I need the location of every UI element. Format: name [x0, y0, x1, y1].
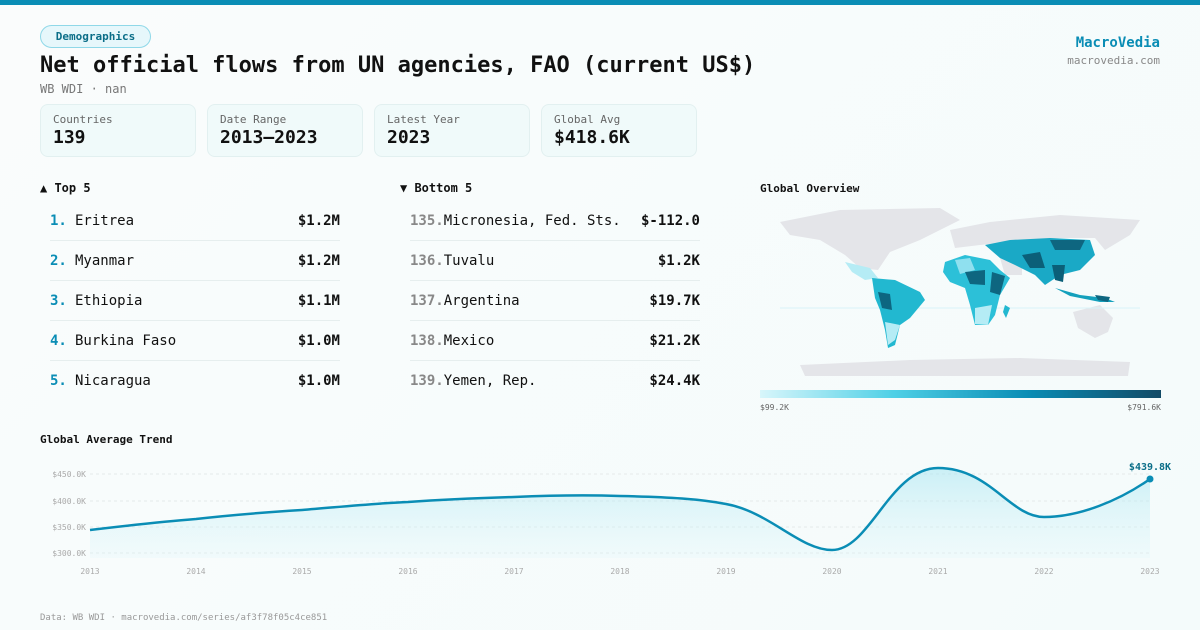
- panel: bottom 5: Yemen, Rep.: [444, 373, 536, 389]
- panel: bottom 5: $19.7K: [649, 292, 700, 308]
- panel: top 5: 4.: [50, 332, 67, 348]
- line chart: 2017: [504, 567, 524, 576]
- line chart: 2015: [292, 567, 312, 576]
- panel: top 5: Burkina Faso: [75, 332, 176, 348]
- panel: bottom 5: $24.4K: [649, 373, 700, 389]
- panel: global overview map: $99.2K: [760, 403, 789, 412]
- panel: bottom 5: $1.2K: [658, 252, 700, 268]
- panel: top 5: 2.: [50, 252, 67, 268]
- tag: Demographics: Demographics: [56, 30, 135, 43]
- panel: bottom 5: Mexico: [444, 332, 494, 348]
- stat: latest year: 2023: [387, 127, 430, 148]
- stat: global avg: $418.6K: [554, 127, 630, 148]
- panel: top 5: $1.1M: [298, 292, 340, 308]
- line chart: $300.0K: [52, 549, 86, 558]
- line chart: 2016: [398, 567, 418, 576]
- line chart: 2022: [1034, 567, 1054, 576]
- panel: top 5: ▲ Top 5: [40, 181, 91, 195]
- panel: bottom 5: 138.: [410, 332, 444, 348]
- stat: countries: [40, 104, 196, 157]
- panel: top 5: Ethiopia: [75, 292, 142, 308]
- footer: Data: WB WDI · macrovedia.com/series/af3f78f05c4ce851: [40, 613, 327, 623]
- panel: top 5: $1.0M: [298, 332, 340, 348]
- panel: bottom 5: 135.: [410, 212, 444, 228]
- panel: bottom 5: Micronesia, Fed. Sts.: [444, 212, 621, 228]
- panel: top 5: Eritrea: [75, 212, 134, 228]
- brand: macrovedia.com: [1067, 54, 1160, 67]
- brand: MacroVedia: [1076, 35, 1160, 51]
- panel: bottom 5: 137.: [410, 292, 444, 308]
- subtitle: WB WDI · nan: [40, 82, 127, 96]
- line chart: 2013: [80, 567, 100, 576]
- panel: bottom 5: $-112.0: [641, 212, 700, 228]
- heading: trend: Global Average Trend: [40, 433, 172, 446]
- map: [780, 208, 1140, 376]
- panel: top 5: Nicaragua: [75, 373, 151, 389]
- stat: date range: 2013–2023: [220, 127, 318, 148]
- stat: countries: 139: [53, 127, 86, 148]
- panel: top 5: 5.: [50, 373, 67, 389]
- stat: date range: Date Range: [220, 113, 286, 126]
- panel: top 5: $1.2M: [298, 212, 340, 228]
- stat: latest year: Latest Year: [387, 113, 460, 126]
- panel: top 5: 3.: [50, 292, 67, 308]
- panel: global overview map: $791.6K: [1127, 403, 1161, 412]
- stat: date range: [207, 104, 363, 157]
- panel: bottom 5: ▼ Bottom 5: [400, 181, 472, 195]
- stat: countries: Countries: [53, 113, 113, 126]
- line chart: 2019: [716, 567, 736, 576]
- line chart: $400.0K: [52, 497, 86, 506]
- line chart: 2020: [822, 567, 842, 576]
- panel: bottom 5: Tuvalu: [444, 252, 494, 268]
- panel: global overview map: Global Overview: [760, 182, 859, 195]
- line chart: $350.0K: [52, 523, 86, 532]
- line chart: $439.8K: [1129, 462, 1171, 473]
- panel: bottom 5: 139.: [410, 373, 444, 389]
- line chart: 2014: [186, 567, 206, 576]
- legend bar: [760, 390, 1161, 398]
- panel: top 5: Myanmar: [75, 252, 134, 268]
- panel: top 5: $1.2M: [298, 252, 340, 268]
- panel: top 5: $1.0M: [298, 373, 340, 389]
- panel: bottom 5: $21.2K: [649, 332, 700, 348]
- top bar: [0, 0, 1200, 5]
- line chart: 2021: [928, 567, 948, 576]
- panel: top 5: [40, 181, 340, 389]
- stat: latest year: [374, 104, 530, 157]
- panel: bottom 5: 136.: [410, 252, 444, 268]
- stat: global avg: [541, 104, 697, 157]
- panel: top 5: 1.: [50, 212, 67, 228]
- line chart: 2018: [610, 567, 630, 576]
- title: Net official flows from UN agencies, FAO (current US$): [40, 53, 755, 78]
- line chart: $450.0K: [52, 470, 86, 479]
- panel: global overview map: [760, 182, 1161, 412]
- panel: bottom 5: Argentina: [444, 292, 520, 308]
- brand: [1067, 35, 1160, 67]
- line chart: 2023: [1140, 567, 1160, 576]
- tag: Demographics: [40, 25, 151, 48]
- stat: global avg: Global Avg: [554, 113, 620, 126]
- panel: bottom 5: [400, 181, 700, 389]
